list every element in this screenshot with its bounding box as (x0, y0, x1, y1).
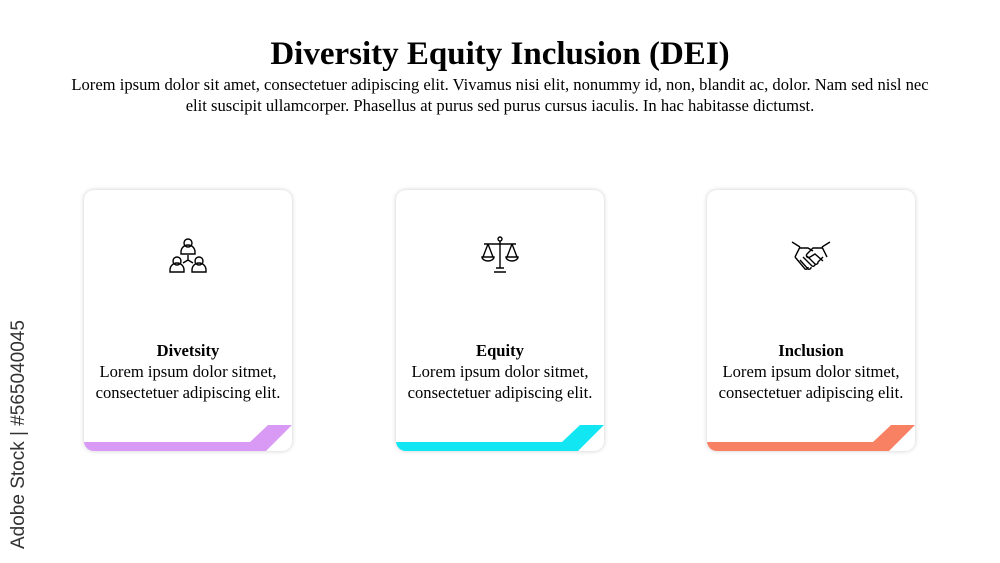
text: inclusion: consectetuer adipiscing elit. (719, 383, 903, 402)
text: diversity: Lorem ipsum dolor sitmet, (100, 362, 276, 381)
accent strip (84, 425, 292, 451)
title: Diversity Equity Inclusion (DEI) (270, 36, 730, 72)
text: inclusion: Inclusion (778, 341, 844, 360)
accent strip (707, 425, 915, 451)
icon: scales (481, 236, 519, 273)
panel: inclusion (707, 190, 915, 451)
text: equity: consectetuer adipiscing elit. (408, 383, 592, 402)
icon: people network (169, 238, 207, 273)
text: diversity: consectetuer adipiscing elit. (96, 383, 280, 402)
subtitle text: elit suscipit ullamcorper. Phasellus at purus sed purus cursus iaculis. In hac habitasse dictumst. (186, 96, 814, 115)
icon: handshake (792, 241, 830, 270)
text: equity (408, 341, 592, 402)
text: inclusion: Lorem ipsum dolor sitmet, (722, 362, 899, 381)
text: diversity (96, 341, 280, 402)
panel: diversity (84, 190, 292, 451)
subtitle text: Lorem ipsum dolor sit amet, consectetuer adipiscing elit. Vivamus nisi elit, nonummy id, non, blandit ac, dolor. Nam sed nisl nec (71, 75, 929, 94)
text: diversity: Divetsity (157, 341, 219, 360)
panel: equity (396, 190, 604, 451)
text: inclusion (719, 341, 903, 402)
accent strip (396, 425, 604, 451)
text: equity: Lorem ipsum dolor sitmet, (412, 362, 588, 381)
subtitle text (71, 75, 929, 115)
text: equity: Equity (476, 341, 524, 360)
watermark text: Adobe Stock | #565040045 (8, 320, 29, 549)
